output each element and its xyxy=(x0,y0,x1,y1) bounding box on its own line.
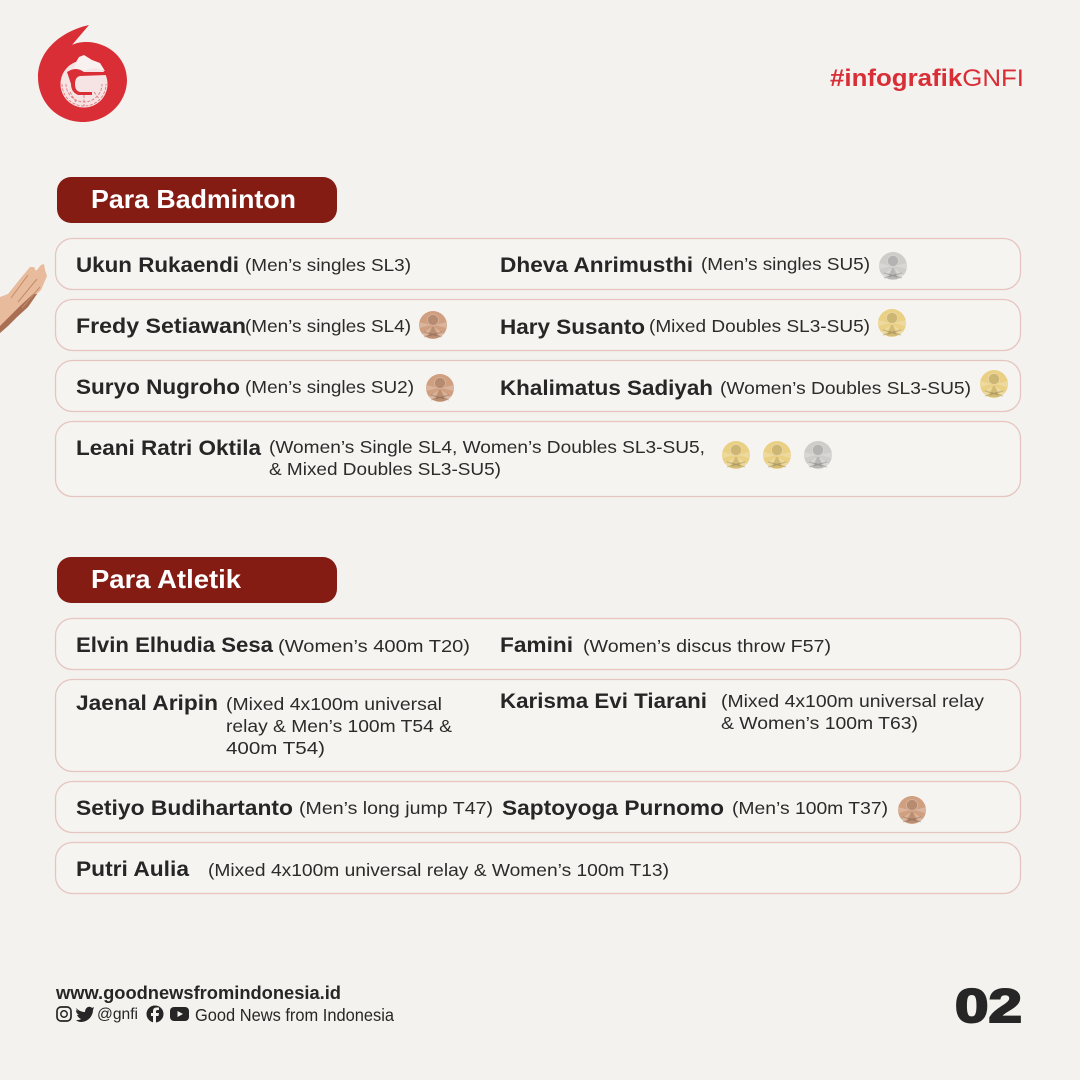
panel: row Fredy and Hary: (Mixed Doubles SL3-SU5) xyxy=(649,316,870,336)
panel: row Suryo and Khalimatus: Suryo Nugroho xyxy=(76,376,240,399)
panel: row Setiyo and Saptoyoga xyxy=(56,782,1020,832)
panel: row Jaenal and Karisma: 400m T54) xyxy=(226,738,325,758)
social handles xyxy=(57,1005,394,1025)
panel: row Setiyo and Saptoyoga: (Men’s 100m T37) xyxy=(732,798,888,818)
panel: row Putri: (Mixed 4x100m universal relay & Women’s 100m T13) xyxy=(208,860,669,880)
panel: row Leani xyxy=(56,422,1020,496)
panel: row Elvin and Famini: Elvin Elhudia Sesa xyxy=(76,634,273,657)
panel: row Jaenal and Karisma: relay & Men’s 100m T54 & xyxy=(226,716,452,736)
panel: row Putri xyxy=(56,842,1020,894)
panel: row Jaenal and Karisma: (Mixed 4x100m universal relay xyxy=(721,691,984,711)
icon: youtube xyxy=(170,1007,189,1021)
panel: row Suryo and Khalimatus: (Women’s Doubles SL3-SU5) xyxy=(720,378,971,398)
panel: row Suryo and Khalimatus: Khalimatus Sadiyah xyxy=(500,377,713,400)
panel: row Putri: Putri Aulia xyxy=(76,858,189,881)
panel: row Ukun and Dheva: Ukun Rukaendi xyxy=(76,254,239,277)
icon: facebook xyxy=(146,1006,164,1023)
heading: Para Atletik: Para Atletik xyxy=(91,564,242,594)
hashtag: #infografik GNFI xyxy=(830,65,1024,92)
panel: row Ukun and Dheva: (Men’s singles SU5) xyxy=(701,254,870,274)
panel: row Ukun and Dheva xyxy=(56,238,1020,290)
panel: row Leani: & Mixed Doubles SL3-SU5) xyxy=(269,459,501,479)
heading: Para Badminton xyxy=(57,177,337,223)
heading: Para Badminton: Para Badminton xyxy=(91,184,296,214)
website url: www.goodnewsfromindonesia.id xyxy=(55,983,341,1003)
page number: 02 xyxy=(955,979,1022,1032)
icon: instagram xyxy=(57,1007,71,1021)
panel: row Setiyo and Saptoyoga: (Men’s long jump T47) xyxy=(299,798,493,818)
heading: Para Atletik xyxy=(57,557,337,603)
page name text: Good News from Indonesia xyxy=(195,1005,394,1025)
panel: row Fredy and Hary: Hary Susanto xyxy=(500,316,645,339)
logo xyxy=(38,25,127,122)
panel: row Jaenal and Karisma: Jaenal Aripin xyxy=(76,692,218,715)
panel: row Ukun and Dheva: (Men’s singles SL3) xyxy=(245,255,411,275)
panel: row Leani: Leani Ratri Oktila xyxy=(76,437,261,460)
panel: row Setiyo and Saptoyoga: Setiyo Budihartanto xyxy=(76,797,293,820)
panel: row Fredy and Hary: Fredy Setiawan xyxy=(76,315,246,338)
panel: row Ukun and Dheva: Dheva Anrimusthi xyxy=(500,254,693,277)
panel: row Elvin and Famini xyxy=(56,618,1020,670)
panel: row Suryo and Khalimatus xyxy=(56,360,1020,412)
panel: row Suryo and Khalimatus: (Men’s singles SU2) xyxy=(245,377,414,397)
panel: row Jaenal and Karisma xyxy=(56,680,1020,772)
panel: row Fredy and Hary: (Men’s singles SL4) xyxy=(245,316,411,336)
handle text: @gnfi xyxy=(97,1006,138,1023)
panel: row Jaenal and Karisma: & Women’s 100m T63) xyxy=(721,713,918,733)
panel: row Elvin and Famini: Famini xyxy=(500,634,573,657)
hand illustration xyxy=(0,264,47,333)
panel: row Jaenal and Karisma: (Mixed 4x100m universal xyxy=(226,694,442,714)
panel: row Setiyo and Saptoyoga: Saptoyoga Purnomo xyxy=(502,797,724,820)
panel: row Elvin and Famini: (Women’s 400m T20) xyxy=(278,636,470,656)
panel: row Jaenal and Karisma: Karisma Evi Tiarani xyxy=(500,690,707,713)
panel: row Leani: (Women’s Single SL4, Women’s Doubles SL3-SU5, xyxy=(269,437,705,457)
panel: row Elvin and Famini: (Women’s discus throw F57) xyxy=(583,636,831,656)
panel: row Fredy and Hary xyxy=(56,300,1020,350)
icon: twitter xyxy=(76,1007,94,1022)
